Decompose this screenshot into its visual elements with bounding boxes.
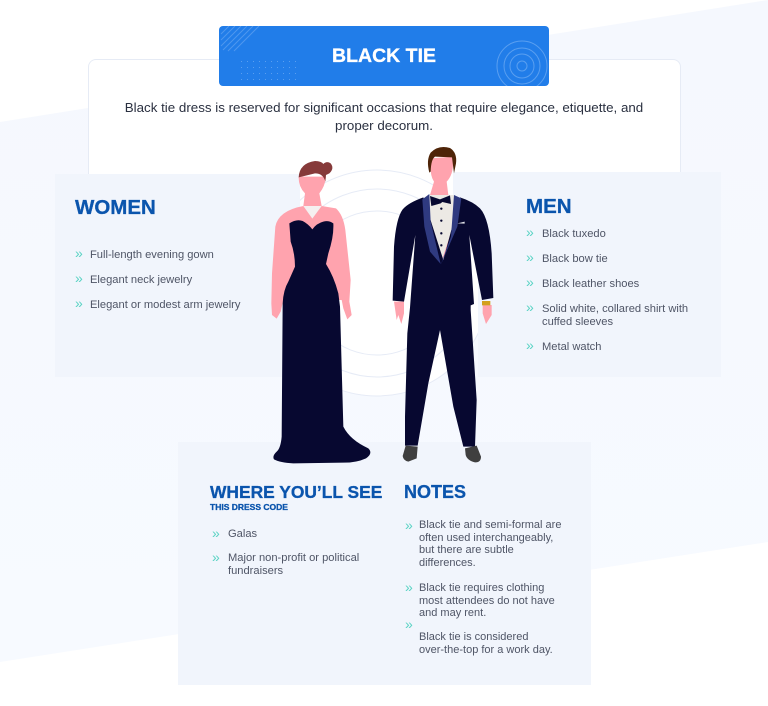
men list: Metal watch (542, 341, 601, 353)
men list (526, 224, 688, 353)
notes list: » (405, 616, 413, 632)
panel: bottom (178, 442, 591, 685)
men list: Solid white, collared shirt with (542, 303, 688, 315)
women list: Full-length evening gown (90, 249, 214, 261)
where list (212, 525, 359, 577)
where subheading: THIS DRESS CODE (210, 502, 288, 512)
notes list: most attendees do not have (419, 595, 555, 607)
panel: men (453, 172, 681, 334)
title banner (219, 26, 549, 86)
where heading: WHERE YOU’LL SEE (210, 482, 382, 502)
women list: » (75, 270, 83, 286)
where list: Galas (228, 528, 257, 540)
notes list (405, 517, 561, 656)
illustration: woman (271, 161, 370, 464)
men list: » (526, 249, 534, 265)
intro text (125, 100, 643, 132)
men heading: MEN (526, 195, 572, 218)
women list (75, 245, 240, 311)
title: BLACK TIE (332, 45, 436, 67)
banner decoration (220, 26, 548, 86)
where list: fundraisers (228, 565, 283, 577)
notes list: Black tie requires clothing (419, 582, 544, 594)
notes list: » (405, 579, 413, 595)
men list: Black bow tie (542, 253, 608, 265)
notes list: often used interchangeably, (419, 532, 553, 544)
women list: » (75, 245, 83, 261)
notes list: and may rent. (419, 607, 486, 619)
men list: Black tuxedo (542, 228, 606, 240)
intro card (88, 59, 681, 201)
notes list: but there are subtle (419, 544, 514, 556)
notes list: differences. (419, 557, 476, 569)
men list: Black leather shoes (542, 278, 639, 290)
women list: » (75, 295, 83, 311)
men list: » (526, 274, 534, 290)
notes list: Black tie and semi-formal are (419, 519, 561, 531)
men list: cuffed sleeves (542, 316, 613, 328)
notes heading: NOTES (404, 482, 466, 502)
panel: women (55, 174, 300, 377)
women heading: WOMEN (75, 196, 156, 219)
where list: » (212, 549, 220, 565)
notes list: » (405, 517, 413, 533)
illustration: man (392, 147, 494, 462)
notes list: Black tie is considered (419, 631, 528, 643)
men list: » (526, 337, 534, 353)
women list: Elegant neck jewelry (90, 274, 192, 286)
where list: » (212, 525, 220, 541)
where list: Major non-profit or political (228, 552, 359, 564)
women list: Elegant or modest arm jewelry (90, 299, 240, 311)
men list: » (526, 299, 534, 315)
men list: » (526, 224, 534, 240)
intro text: Black tie dress is reserved for significant occasions that require elegance, etiquette, and (125, 100, 643, 115)
notes list: over-the-top for a work day. (419, 644, 553, 656)
intro text: proper decorum. (335, 118, 433, 132)
